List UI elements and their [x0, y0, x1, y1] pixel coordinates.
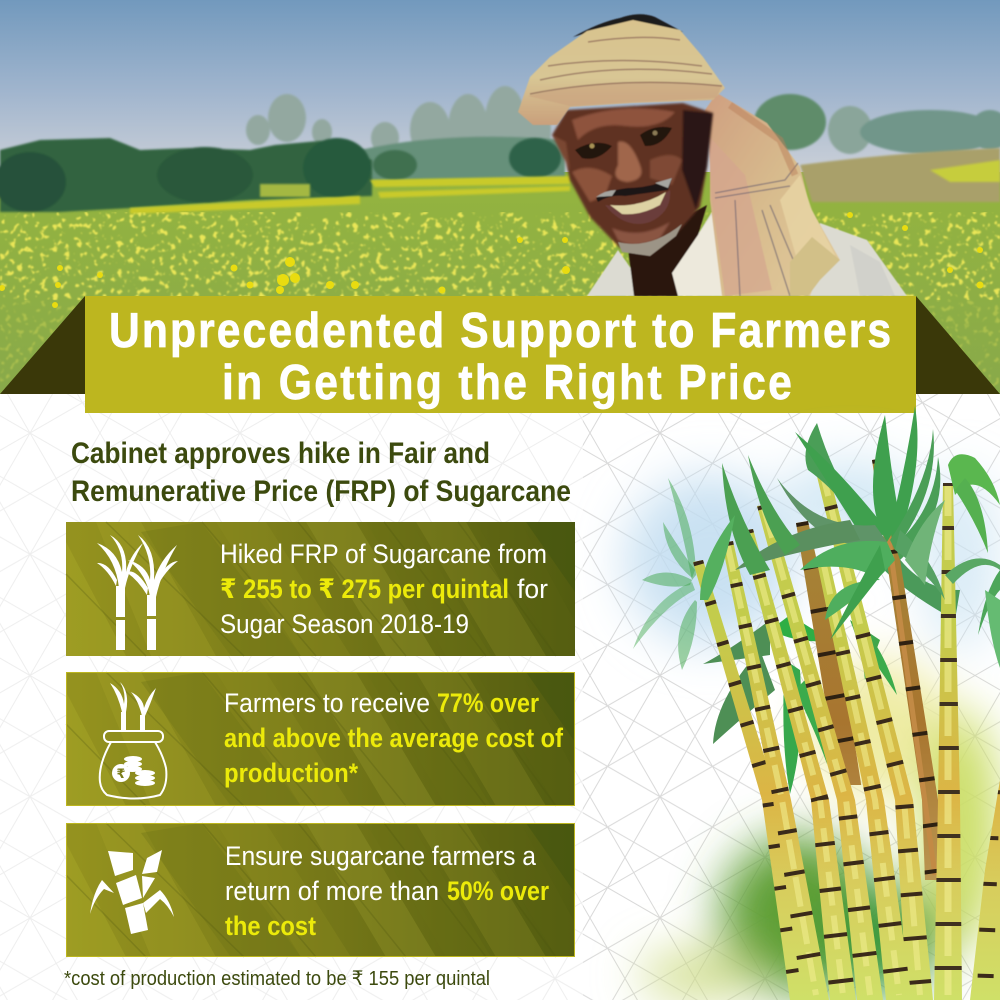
farmer neck: [628, 205, 707, 296]
near trees: [0, 138, 561, 212]
card text: Ensure sugarcane farmers a: [225, 841, 537, 871]
farmer scarf: [705, 93, 840, 296]
front leaves: [700, 406, 1000, 668]
farmer face: [552, 103, 713, 255]
farmer beard: [618, 224, 682, 256]
panel: 77 percent return: and above the average cost of: [224, 723, 564, 753]
mustard flowers: [0, 212, 984, 308]
icon: cut sugarcane pieces: [90, 850, 174, 934]
farmer shirt: [587, 210, 907, 296]
panel: 77 percent return: [66, 672, 575, 806]
title text line 2: in Getting the Right Price: [222, 354, 792, 410]
panel: 50 percent return: [66, 823, 575, 957]
panel: 77 percent return: 77% over: [437, 688, 539, 718]
sugarcane illustration: [625, 406, 1000, 1000]
title text line 1: Unprecedented Support to Farmers: [109, 302, 891, 358]
footnote: *cost of production estimated to be ₹ 155 per quintal: [64, 968, 490, 990]
intro heading: [71, 437, 571, 508]
flower strips: [130, 176, 570, 214]
panel: 50 percent return: return of more than: [225, 876, 439, 906]
farmer hair: [573, 14, 683, 37]
farmer mouth and moustache: [605, 190, 670, 224]
farmer turban: [518, 20, 725, 125]
farmer eyes: [575, 127, 672, 159]
distant trees: [246, 86, 1000, 180]
intro heading: Cabinet approves hike in Fair and: [71, 437, 490, 470]
title banner: [85, 296, 916, 413]
icon: sugarcane stalks: [97, 535, 178, 650]
panel: hiked FRP: for: [517, 574, 548, 604]
panel: 50 percent return: 50% over: [447, 876, 549, 906]
icon: sack with sugarcane and coins: ₹: [116, 766, 126, 781]
panel: hiked FRP: Sugar Season 2018-19: [220, 609, 469, 639]
intro heading: Remunerative Price (FRP) of Sugarcane: [71, 475, 571, 508]
title banner side folds: [0, 296, 1000, 394]
panel: 50 percent return: the cost: [225, 911, 316, 941]
hill flower patch: [930, 160, 1000, 182]
card text: Hiked FRP of Sugarcane from: [220, 539, 547, 569]
panel: hiked FRP: ₹ 255 to ₹ 275 per quintal: [220, 574, 509, 604]
photo: mustard field, trees and sky: [0, 0, 1000, 394]
panel: 77 percent return: production*: [224, 758, 358, 788]
card text: Farmers to receive: [224, 688, 430, 718]
panel: hiked FRP: [66, 522, 575, 656]
photo: smiling farmer: [518, 14, 907, 296]
hill at right: [800, 148, 1000, 202]
back leaves: [633, 478, 960, 794]
back canes: [690, 455, 1000, 1000]
watercolor wash: [625, 460, 998, 997]
icon: sack with sugarcane and coins: [100, 682, 166, 798]
